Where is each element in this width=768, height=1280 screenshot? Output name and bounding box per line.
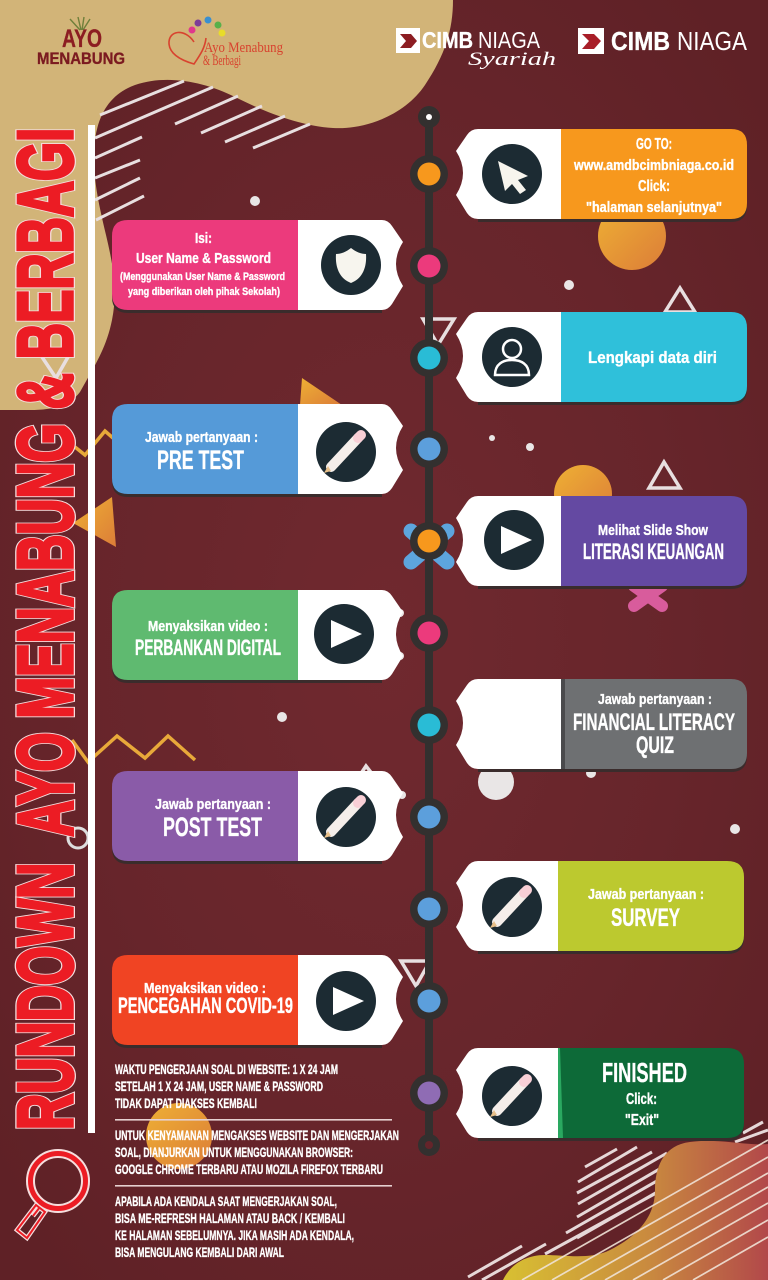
notes: troubleshooting: BISA MENGULANG KEMBALI DARI AWAL [115, 1245, 284, 1260]
node 11 [410, 1074, 448, 1112]
card: user name and password [112, 220, 403, 313]
logo: Ayo Menabung & Berbagi: & Berbagi [203, 53, 241, 69]
notes: troubleshooting [115, 1194, 354, 1260]
decorative crosses [411, 531, 662, 606]
node 2 [410, 247, 448, 285]
logo: Ayo Menabung: AYO [62, 25, 102, 53]
icon: play [314, 604, 374, 664]
icon: shield [321, 235, 381, 295]
card: perbankan digital: Menyaksikan video : [148, 618, 268, 635]
card: perbankan digital [112, 590, 403, 683]
card: user name and password: Isi: [195, 230, 212, 247]
card: post test: Jawab pertanyaan : [155, 796, 271, 813]
logo: Ayo Menabung & Berbagi: Ayo Menabung [204, 40, 283, 56]
decorative zigzags [72, 431, 195, 762]
logo: Ayo Menabung & Berbagi [169, 16, 283, 69]
timeline [410, 106, 448, 1156]
card: pre test: PRE TEST [157, 445, 244, 475]
card: user name and password: User Name & Password [136, 250, 271, 267]
start node [418, 106, 440, 128]
vertical white bar [88, 125, 95, 1133]
node 4 [410, 430, 448, 468]
hatch over blob [522, 1140, 768, 1280]
card: literasi keuangan: Melihat Slide Show [598, 522, 708, 539]
hatch lines bottom right [468, 1122, 768, 1280]
card: financial literacy quiz: Jawab pertanyaan : [598, 691, 712, 708]
notes: troubleshooting: BISA ME-REFRESH HALAMAN ATAU BACK / KEMBALI [115, 1211, 345, 1226]
logo: CIMB Niaga Syariah: Syariah [468, 49, 556, 70]
card: pre test [112, 404, 403, 497]
node 5 [410, 522, 448, 560]
notes: browser: SOAL, DIANJURKAN UNTUK MENGGUNAKAN BROWSER: [115, 1145, 353, 1160]
card: lengkapi data diri: Lengkapi data diri [588, 348, 717, 367]
node 6 [410, 614, 448, 652]
card: finished: "Exit" [625, 1112, 659, 1129]
node 3 [410, 339, 448, 377]
logo: Ayo Menabung [37, 17, 125, 68]
decorative orange triangles [73, 378, 342, 547]
card: go to website [456, 129, 747, 222]
icon: pencil [316, 787, 376, 847]
node 7 [410, 706, 448, 744]
card: finished: Click: [626, 1091, 657, 1108]
card: finished [456, 1048, 744, 1141]
icon: pencil [316, 422, 376, 482]
card: post test: POST TEST [163, 812, 262, 842]
logo: CIMB Niaga: NIAGA [677, 26, 748, 56]
notes: browser [115, 1128, 399, 1177]
decorative dots [250, 196, 740, 834]
card: financial literacy quiz [456, 679, 747, 772]
blob bottom right [503, 1141, 768, 1280]
card: go to website: Click: [638, 178, 670, 195]
card: pre test: Jawab pertanyaan : [145, 429, 258, 446]
decorative orange circles [146, 202, 666, 1169]
notes: time limit: WAKTU PENGERJAAN SOAL DI WEBSITE: 1 X 24 JAM [115, 1062, 338, 1077]
icon: play [484, 510, 544, 570]
card: literasi keuangan [456, 496, 747, 589]
card: survey: SURVEY [611, 904, 680, 932]
notes: time limit: SETELAH 1 X 24 JAM, USER NAME & PASSWORD [115, 1079, 323, 1094]
decorative ring [68, 828, 88, 848]
card: lengkapi data diri [456, 312, 747, 405]
card: user name and password: yang diberikan oleh pihak Sekolah) [128, 286, 280, 298]
icon: play [316, 971, 376, 1031]
card: go to website: GO TO: [636, 136, 672, 153]
card: user name and password: (Menggunakan User Name & Password [120, 271, 285, 283]
card: post test [112, 771, 403, 864]
node 1 [410, 155, 448, 193]
end node [418, 1134, 440, 1156]
notes: troubleshooting: KE HALAMAN SEBELUMNYA. JIKA MASIH ADA KENDALA, [115, 1228, 354, 1243]
logo: CIMB Niaga Syariah: CIMB [422, 27, 473, 53]
card: pencegahan covid-19: Menyaksikan video : [144, 980, 266, 997]
node 10 [410, 982, 448, 1020]
card: perbankan digital: PERBANKAN DIGITAL [135, 635, 281, 660]
card: finished: FINISHED [602, 1057, 687, 1088]
icon: pencil [482, 877, 542, 937]
logo: CIMB Niaga Syariah: NIAGA [478, 27, 541, 53]
icon: pencil [482, 1066, 542, 1126]
tan blob top left [0, 0, 453, 410]
logo: CIMB Niaga Syariah [396, 27, 556, 70]
notes: browser: UNTUK KENYAMANAN MENGAKSES WEBSITE DAN MENGERJAKAN [115, 1128, 399, 1143]
card: pencegahan covid-19 [112, 955, 403, 1048]
notes: time limit: TIDAK DAPAT DIAKSES KEMBALI [115, 1096, 257, 1111]
card: survey: Jawab pertanyaan : [588, 886, 704, 903]
hatch lines top [95, 81, 310, 220]
card: survey [456, 861, 744, 954]
logo: Ayo Menabung: MENABUNG [37, 49, 125, 68]
card: go to website: "halaman selanjutnya" [586, 199, 722, 216]
notes: time limit [115, 1062, 338, 1111]
notes: browser: GOOGLE CHROME TERBARU ATAU MOZILA FIREFOX TERBARU [115, 1162, 383, 1177]
icon: magnifier [17, 1154, 86, 1238]
card: financial literacy quiz: QUIZ [636, 732, 674, 759]
logo: CIMB Niaga: CIMB [611, 26, 670, 56]
node 8 [410, 798, 448, 836]
card: go to website: www.amdbcimbniaga.co.id [573, 157, 734, 174]
notes: troubleshooting: APABILA ADA KENDALA SAAT MENGERJAKAN SOAL, [115, 1194, 337, 1209]
decorative outline triangles [42, 288, 695, 986]
icon: person [482, 327, 542, 387]
icon: cursor [482, 144, 542, 204]
card: pencegahan covid-19: PENCEGAHAN COVID-19 [118, 993, 293, 1018]
logo: CIMB Niaga [578, 26, 748, 56]
node 9 [410, 890, 448, 928]
